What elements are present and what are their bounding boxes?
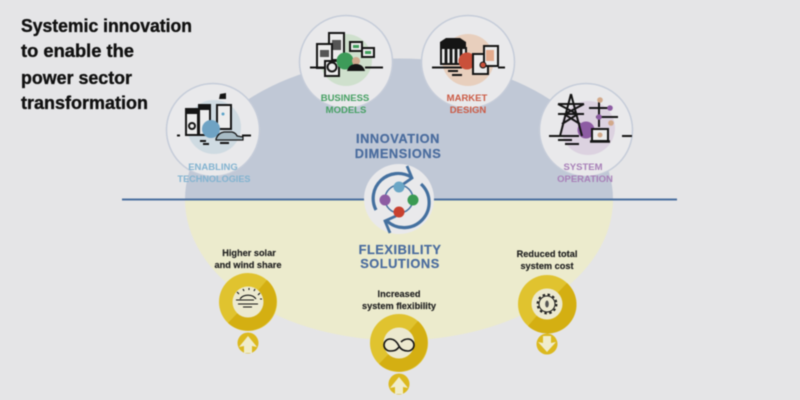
title: power sector (21, 67, 132, 88)
flexibility solutions half-ellipse (185, 200, 613, 340)
label: business models: MODELS (326, 105, 366, 116)
icon: up arrow (390, 377, 408, 394)
title: Systemic innovation (21, 15, 192, 36)
icon: batteries, phone and car (177, 93, 251, 154)
label: higher solar and wind share: Higher solar (222, 248, 276, 258)
icon: gear with coin (538, 294, 556, 314)
label: system operation: OPERATION (557, 174, 613, 185)
icon: pylon and grid (549, 94, 632, 155)
label: enabling technologies: ENABLING (188, 162, 238, 173)
heading: innovation dimensions: DIMENSIONS (355, 146, 441, 161)
label: market design: MARKET (447, 93, 488, 104)
central cycle icon (364, 164, 434, 234)
icon: sun and wind (236, 288, 262, 307)
innovation dimensions half-ellipse (185, 58, 613, 200)
label: reduced total system cost (517, 249, 577, 271)
indicator: higher solar and wind share (215, 248, 281, 354)
label: increased system flexibility (362, 289, 437, 311)
panel: business models (300, 16, 392, 116)
label: higher solar and wind share: and wind share (215, 260, 281, 270)
icon: infinity loop (384, 339, 414, 351)
heading: flexibility solutions (359, 242, 441, 271)
label: system operation (557, 162, 613, 185)
label: reduced total system cost: Reduced total (517, 249, 577, 259)
label: system operation: SYSTEM (563, 162, 603, 173)
panel: system operation (540, 84, 632, 185)
label: increased system flexibility: Increased (378, 289, 420, 299)
heading: innovation dimensions: INNOVATION (356, 131, 440, 146)
horizontal divider line (122, 198, 677, 200)
panel: enabling technologies (166, 84, 260, 185)
heading: innovation dimensions (355, 131, 441, 161)
label: increased system flexibility: system flexibility (362, 301, 437, 311)
icon: down arrow (538, 336, 556, 352)
title: to enable the (21, 40, 134, 61)
indicator: reduced total system cost (517, 249, 577, 354)
heading: flexibility solutions: SOLUTIONS (360, 256, 440, 271)
heading: flexibility solutions: FLEXIBILITY (359, 242, 441, 257)
icon: bank and contracts (432, 34, 505, 86)
label: business models: BUSINESS (321, 93, 369, 104)
label: enabling technologies (178, 162, 250, 185)
title (21, 15, 192, 113)
label: enabling technologies: TECHNOLOGIES (178, 174, 250, 185)
label: market design (447, 93, 488, 116)
label: higher solar and wind share (215, 248, 281, 270)
icon: documents and meeting (310, 33, 383, 86)
label: reduced total system cost: system cost (520, 261, 574, 271)
label: business models (321, 93, 369, 116)
indicator: increased system flexibility (362, 289, 437, 394)
title: transformation (21, 92, 148, 113)
label: market design: DESIGN (450, 105, 486, 116)
icon: up arrow (239, 336, 257, 353)
panel: market design (422, 16, 514, 116)
